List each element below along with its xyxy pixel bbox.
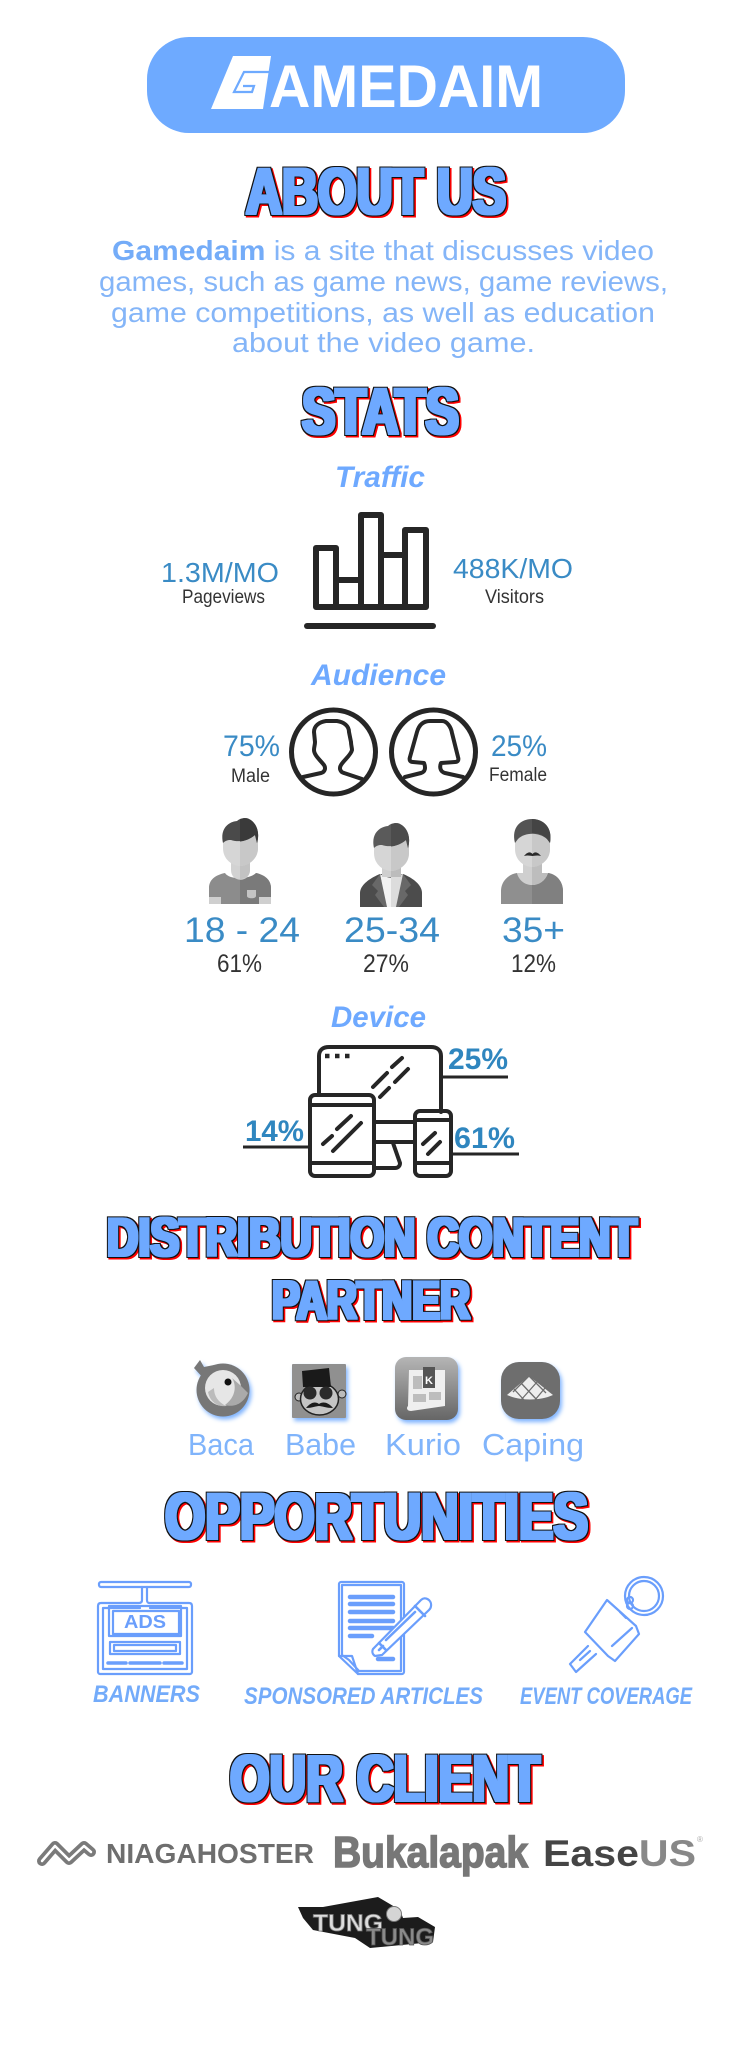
icon: adult person <box>360 823 422 907</box>
age group labels: 27% <box>363 950 409 978</box>
icon: microphone <box>570 1577 663 1672</box>
client: Bukalapak: Bukalapak <box>333 1828 528 1877</box>
client: Tung Tung: TUNG <box>366 1924 434 1951</box>
icon: older person <box>501 819 563 904</box>
stat: pageviews: Pageviews <box>182 587 265 608</box>
subheading: audience: Audience <box>310 659 446 692</box>
heading: stats: STATS <box>302 374 459 448</box>
Baca icon <box>194 1360 250 1416</box>
client: Tung Tung: TUNG <box>313 1910 383 1937</box>
age group labels: 35+ <box>502 911 565 950</box>
icon: young person <box>209 818 271 904</box>
icon: female profile <box>392 710 476 794</box>
opportunity: sponsored articles <box>244 1582 483 1710</box>
heading: about us: ABOUT US <box>246 154 506 228</box>
partner: Kurio <box>385 1357 461 1462</box>
icon: bar chart <box>307 515 433 626</box>
stat: male: 75% <box>223 730 280 763</box>
client: Tung Tung <box>298 1897 435 1951</box>
opportunity: event coverage: EVENT COVERAGE <box>520 1683 693 1710</box>
client: EaseUS: ® <box>697 1835 703 1844</box>
logo G mark <box>211 56 271 109</box>
about text: games, such as game news, game reviews, <box>99 266 668 297</box>
stat: pageviews: 1.3M/MO <box>161 557 279 588</box>
about text: about the video game. <box>232 327 535 358</box>
heading: distribution content partner <box>107 1206 637 1331</box>
opportunity: sponsored articles: SPONSORED ARTICLES <box>244 1683 483 1710</box>
about text <box>99 235 668 358</box>
icon: devices <box>310 1047 451 1176</box>
partner: Baca: Baca <box>188 1427 255 1462</box>
opportunity: event coverage <box>520 1577 693 1710</box>
device share: mobile: 61% <box>454 1122 515 1155</box>
partner: Babe <box>285 1364 356 1462</box>
partner: Caping <box>482 1362 584 1462</box>
Niagahoster mark <box>42 1846 91 1861</box>
age group labels <box>184 911 565 978</box>
about text: game competitions, as well as education <box>111 297 655 328</box>
heading: opportunities: OPPORTUNITIES <box>165 1479 588 1553</box>
stat: female: Female <box>489 765 547 786</box>
stat: male <box>223 730 280 787</box>
icon: ads banner: ADS <box>124 1612 166 1632</box>
subheading: traffic: Traffic <box>335 461 425 494</box>
Babe icon <box>292 1364 346 1418</box>
icon: male profile <box>292 710 376 794</box>
opportunity: banners: BANNERS <box>93 1681 200 1708</box>
age group labels: 12% <box>511 950 556 978</box>
subheading: device: Device <box>331 1001 426 1034</box>
partner: Baca <box>188 1360 255 1462</box>
icon: document and pencil <box>339 1582 431 1674</box>
Kurio icon: K <box>425 1375 433 1387</box>
client: Niagahoster: NIAGAHOSTER <box>106 1838 314 1869</box>
partner: Kurio: Kurio <box>385 1427 461 1462</box>
partner: Babe: Babe <box>285 1427 356 1462</box>
device share: desktop: 25% <box>448 1043 508 1076</box>
opportunity: banners <box>93 1582 200 1708</box>
logo wordmark: AMEDAIM <box>269 53 543 120</box>
age group labels: 25-34 <box>344 911 440 950</box>
stat: visitors <box>453 553 573 608</box>
stat: female: 25% <box>491 730 547 763</box>
stat: male: Male <box>231 766 270 787</box>
about text: Gamedaim is a site that discusses video <box>112 235 654 266</box>
stat: visitors: 488K/MO <box>453 553 573 584</box>
stat: pageviews <box>161 557 279 608</box>
device share: tablet: 14% <box>245 1115 304 1148</box>
age group labels: 61% <box>217 950 262 978</box>
heading: our client: OUR CLIENT <box>230 1741 540 1815</box>
heading: distribution content partner: PARTNER <box>272 1269 470 1331</box>
Caping icon <box>501 1362 560 1419</box>
partner: Caping: Caping <box>482 1427 584 1462</box>
age group labels: 18 - 24 <box>184 911 300 950</box>
logo pill <box>147 37 625 133</box>
stat: female <box>489 730 547 786</box>
client: EaseUS: Ease US <box>543 1833 696 1874</box>
stat: visitors: Visitors <box>485 587 544 608</box>
